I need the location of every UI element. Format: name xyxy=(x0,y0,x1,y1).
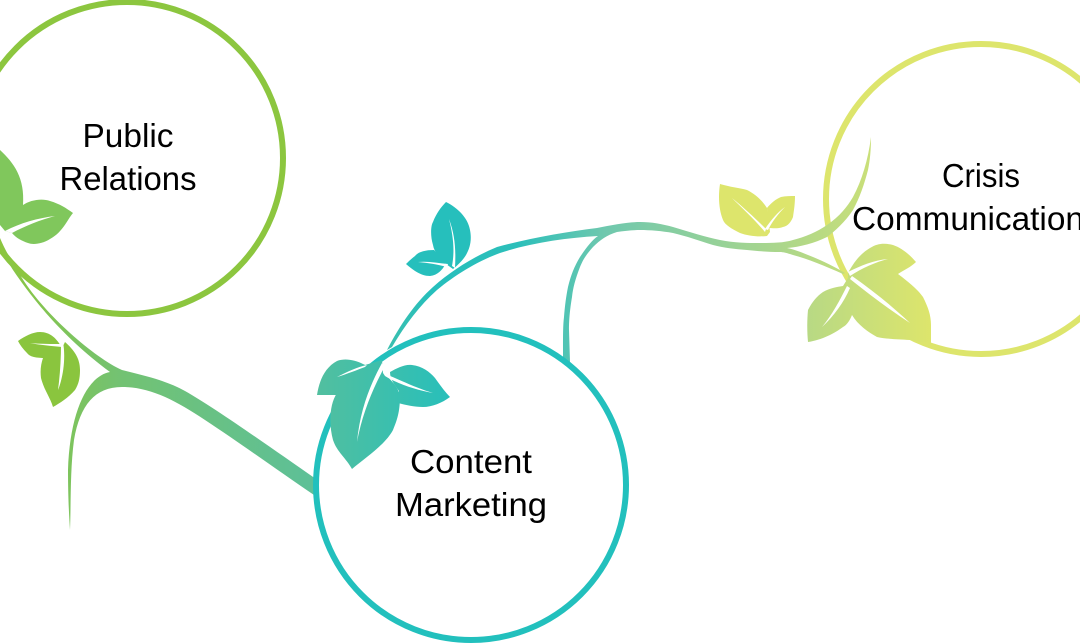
label: Content Marketing xyxy=(395,443,547,523)
leaves: yellow cluster on Crisis Communication circle xyxy=(807,244,931,343)
circle: Public Relations xyxy=(0,2,283,314)
circle: Crisis Communication xyxy=(826,44,1080,354)
leaves: small pair below Public Relations circle xyxy=(18,332,80,407)
vine: middle and right stem with branches xyxy=(387,137,871,362)
label: Content Marketing: Content xyxy=(410,443,532,480)
vine: left stem with branches xyxy=(0,238,316,530)
label: Crisis Communication: Communication xyxy=(852,200,1080,237)
leaves: teal cluster on Content Marketing circle xyxy=(317,360,450,469)
label: Crisis Communication xyxy=(852,157,1080,237)
label: Crisis Communication: Crisis xyxy=(942,157,1020,194)
circle: Content Marketing xyxy=(316,330,626,640)
label: Public Relations xyxy=(60,117,196,197)
label: Content Marketing: Marketing xyxy=(395,486,547,523)
label: Public Relations: Public xyxy=(82,117,174,154)
label: Public Relations: Relations xyxy=(60,160,196,197)
leaves: yellow pair on upper vine xyxy=(719,184,795,236)
leaves: teal top pair xyxy=(406,202,471,276)
leaves: Public Relations cluster xyxy=(0,150,73,244)
